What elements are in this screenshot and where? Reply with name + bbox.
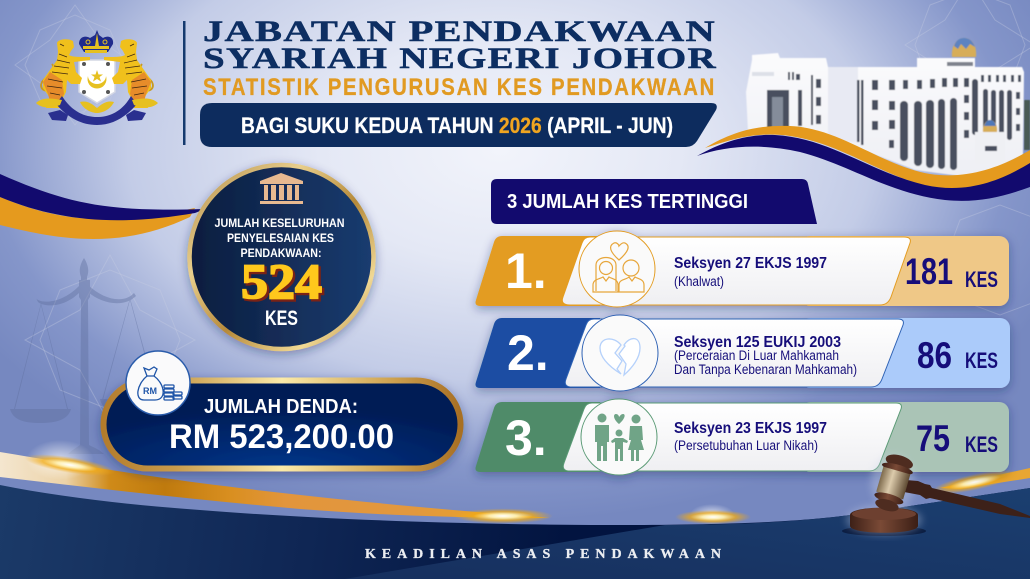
panel: rank 2: Dan Tanpa Kebenaran Mahkamah) xyxy=(674,362,857,377)
case count: 181 xyxy=(905,251,953,292)
panel: rank 2: KES xyxy=(965,348,998,373)
period banner xyxy=(200,103,717,147)
total unit: KES xyxy=(265,307,298,330)
background star pattern xyxy=(15,0,1030,425)
section heading xyxy=(491,179,817,224)
total value: 524 xyxy=(243,255,324,311)
total label: JUMLAH KESELURUHAN xyxy=(214,218,344,230)
tiger left xyxy=(41,39,90,108)
title: STATISTIK PENGURUSAN KES PENDAKWAAN xyxy=(203,74,716,101)
total label: PENYELESAIAN KES xyxy=(227,233,334,245)
title: SYARIAH NEGERI JOHOR xyxy=(203,42,717,75)
panel: rank 1: (Khalwat) xyxy=(674,274,724,289)
crown xyxy=(79,30,113,52)
panel: total fine xyxy=(104,380,460,468)
panel: rank 1: KES xyxy=(965,267,998,292)
wave: top right xyxy=(697,126,1030,201)
icon: family xyxy=(581,399,657,475)
header divider xyxy=(183,21,186,145)
rank number: 1. xyxy=(505,243,547,299)
rank number: 2. xyxy=(507,325,549,381)
panel: rank 2 xyxy=(476,315,1010,391)
case count: 75 xyxy=(916,418,950,459)
total value: 524 xyxy=(241,253,322,309)
case text: Seksyen 27 EKJS 1997 xyxy=(674,255,827,272)
rank number: 3. xyxy=(505,410,547,466)
icon: money bag xyxy=(126,351,190,415)
case text: Seksyen 125 EUKIJ 2003 xyxy=(674,334,841,351)
tiger right xyxy=(104,39,153,108)
block xyxy=(850,508,918,533)
panel: total fine: JUMLAH DENDA: xyxy=(204,396,358,418)
small dome xyxy=(983,120,997,132)
title xyxy=(203,15,717,101)
panel: rank 3: KES xyxy=(965,432,998,457)
panel: total cases circle xyxy=(190,165,374,349)
crest of Johor xyxy=(36,30,158,125)
motto: KEADILAN ASAS PENDAKWAAN xyxy=(365,547,721,562)
icon: gavel xyxy=(842,451,1030,536)
panel: total fine: RM 523,200.00 xyxy=(169,418,394,456)
panel: rank 3 xyxy=(476,399,1009,475)
dome xyxy=(952,38,976,57)
case text: Seksyen 23 EKJS 1997 xyxy=(674,420,827,437)
title: JABATAN PENDAKWAAN xyxy=(203,15,716,48)
section heading: 3 JUMLAH KES TERTINGGI xyxy=(507,191,748,213)
shield xyxy=(79,60,115,103)
scales of justice watermark xyxy=(10,258,150,454)
panel: rank 3: (Persetubuhan Luar Nikah) xyxy=(674,438,818,453)
icon: money bag: RM xyxy=(143,386,157,396)
panel: rank 2: (Perceraian Di Luar Mahkamah xyxy=(674,348,839,363)
gold ribbon right xyxy=(675,465,1030,524)
case count: 86 xyxy=(917,335,952,376)
handle xyxy=(904,480,1030,518)
icon: courthouse xyxy=(260,173,303,204)
total label: PENDAKWAAN: xyxy=(240,248,322,260)
panel: rank 1 xyxy=(476,231,1009,307)
ribbon and scrolls xyxy=(56,96,137,125)
bottom navy band xyxy=(0,485,1030,579)
wave: left xyxy=(0,174,205,239)
gold ribbon left xyxy=(0,440,553,524)
building photo xyxy=(746,38,1030,178)
total label xyxy=(214,218,344,260)
head xyxy=(870,451,917,515)
period banner: BAGI SUKU KEDUA TAHUN 2026 (APRIL - JUN) xyxy=(241,113,673,138)
icon: couple xyxy=(579,231,655,307)
icon: broken heart xyxy=(582,315,658,391)
